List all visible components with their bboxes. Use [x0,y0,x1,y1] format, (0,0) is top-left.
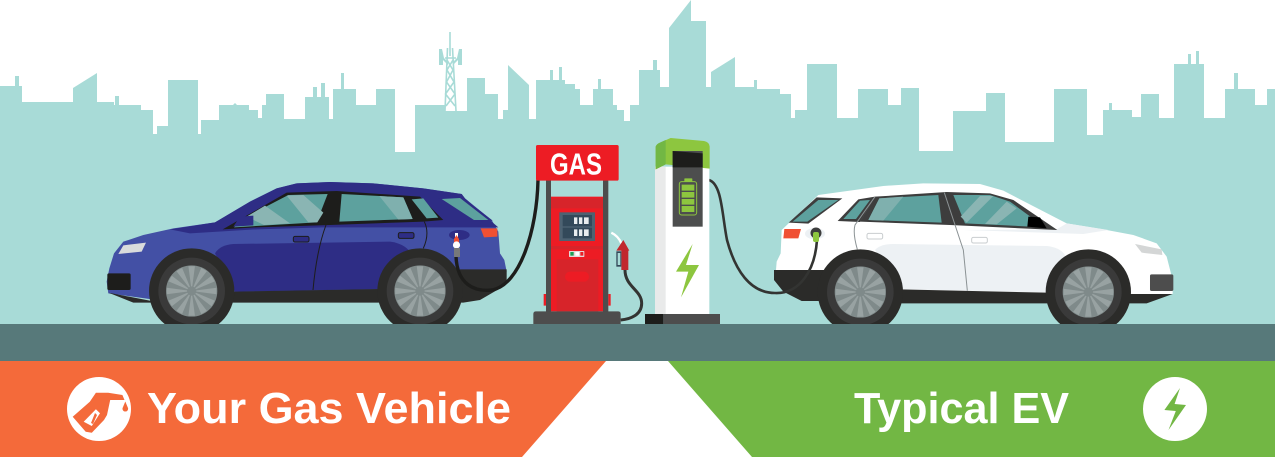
charge plug [810,228,822,242]
underbody [108,269,507,303]
icon: fuel nozzle [67,377,131,441]
side mirror [1027,217,1047,228]
front wheel [149,248,234,334]
fuel port [449,230,470,240]
quarter glass [843,200,870,219]
icon: lightning bolt [1143,377,1207,441]
battery icon [679,178,697,215]
side glass reflection [379,196,413,220]
pump bands [551,198,603,249]
rear window [789,197,842,224]
gas nozzle in car [453,233,460,257]
station base dark [645,314,663,324]
charging station [645,138,720,324]
rear wheel [377,248,463,334]
tail light [783,229,801,238]
car body [776,183,1173,298]
grille [1150,274,1173,291]
white nozzle spout [611,233,621,243]
label: typical EV: Typical EV [854,384,1070,433]
lightning bolt [676,244,699,297]
tail light [481,228,497,237]
pump body [551,197,603,311]
door handles [293,233,414,242]
quarter window [838,197,875,222]
screen top [673,151,703,167]
roof shading [170,182,498,233]
rear window [439,197,493,222]
window frame [860,192,1057,230]
gas pump [533,138,720,324]
lower panel [557,259,598,311]
windshield reflection [961,196,1017,224]
banner: typical EV [668,361,1275,457]
side glass [339,194,413,222]
side glass reflection [868,197,903,221]
car body [107,182,507,300]
pump nozzle [616,240,629,270]
radio tower [439,32,462,111]
grille [107,273,131,290]
station base [663,314,720,324]
banner: your gas vehicle [0,361,606,457]
windshield reflection [247,195,323,225]
GAS sign text: GAS [550,146,602,182]
charging cable [709,180,817,293]
underbody [774,270,1173,303]
windshield glass [953,195,1045,227]
side glass [868,195,942,223]
station top side [656,140,666,169]
screen [673,151,703,227]
station top [656,138,710,169]
gas hose [456,180,538,290]
belt shading [963,223,1108,234]
side mirror [233,216,253,227]
door seams [313,222,427,290]
front wheel [1046,249,1131,335]
blue gas car [107,182,507,334]
headlight [1135,244,1162,255]
panel handle [565,272,589,282]
quarter glass [412,198,438,218]
pump posts [546,180,608,312]
windshield glass [234,194,328,227]
indicator lights [569,251,584,257]
rear window glass [793,200,838,222]
GAS sign board [536,145,619,181]
window frame [223,191,443,229]
side flaps [544,294,611,306]
label: your gas vehicle: Your Gas Vehicle [147,384,511,433]
display [559,212,595,241]
rear wheel [818,249,903,335]
lower door panel [875,244,1065,292]
city skyline [0,0,1275,330]
door seams [854,193,967,291]
rear window glass [442,198,488,220]
lower door panel [215,242,410,292]
road [0,324,1275,361]
nozzle hose on pump [621,270,642,320]
charge port [805,228,825,239]
white electric car [774,183,1173,335]
door handles [867,233,987,243]
station body [655,167,709,314]
headlight [118,243,146,254]
station side shade [655,167,666,314]
pump base [533,311,621,324]
